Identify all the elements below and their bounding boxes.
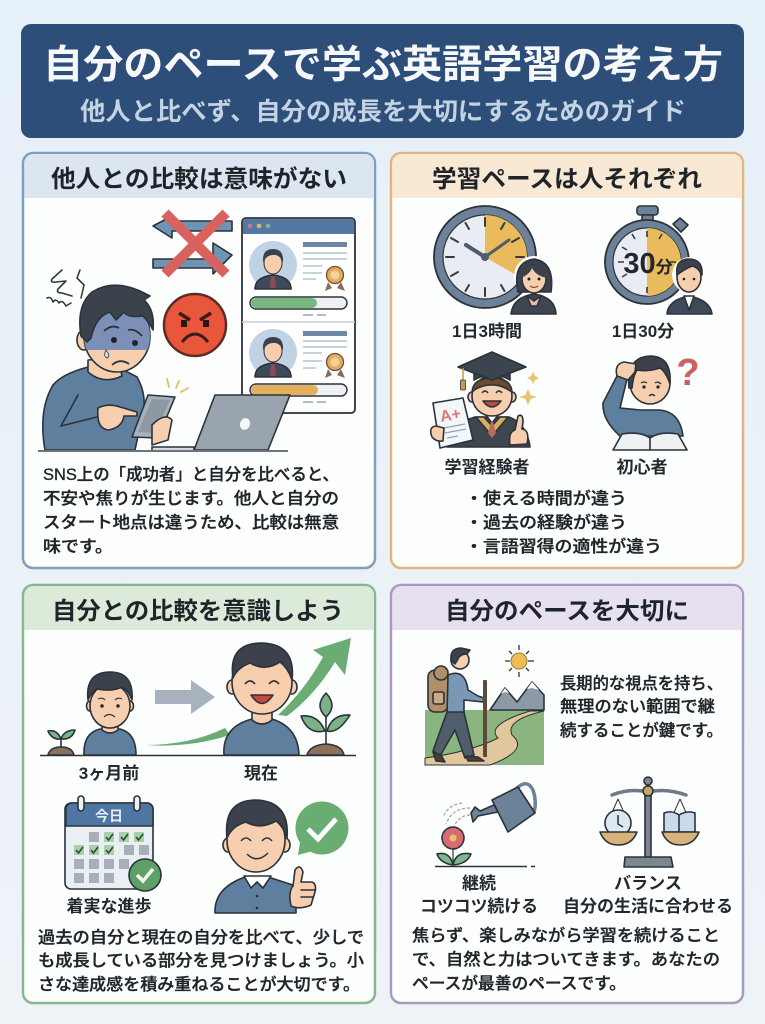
panel: 他人との比較は意味がない [23, 153, 375, 568]
profile card 2 [249, 329, 347, 402]
icon: woman [511, 256, 556, 314]
label: 学習経験者 [444, 457, 530, 477]
text block: スタート地点は違うため、比較は無意 [43, 513, 339, 532]
text block [38, 928, 365, 994]
icon: grown plant [301, 693, 350, 755]
text block: 無理のない範囲で継 [560, 697, 715, 716]
icon: angry face [164, 294, 226, 356]
arrow: gray [155, 680, 215, 714]
label: continuation: コツコツ続ける [420, 897, 538, 916]
panel: 自分のペースを大切に [391, 585, 743, 1003]
profile window [242, 218, 355, 413]
icon: question mark: ? [676, 352, 700, 394]
text block [43, 465, 339, 556]
heading: 自分のペースを大切に [445, 598, 689, 625]
icon: growth arrow [145, 638, 351, 746]
icon: stopwatch [605, 206, 689, 304]
text: 30分: 30分 [623, 248, 673, 280]
icon: check speech bubble [296, 802, 348, 855]
text block: さな達成感を積み重ねることが大切です。 [38, 974, 360, 994]
text block: 過去の自分と現在の自分を比べて、少しで [38, 928, 364, 947]
profile card 1 [249, 241, 347, 315]
subtitle: 他人と比べず、自分の成長を大切にするためのガイド [80, 98, 686, 126]
illustration: smiling person now [224, 643, 299, 755]
illustration: hiker on a path [425, 645, 544, 765]
text block: SNS上の「成功者」と自分を比べると、 [43, 465, 339, 484]
text block: 不安や焦りが生じます。他人と自分の [43, 488, 339, 508]
text block [560, 674, 723, 740]
label: 初心者 [616, 458, 668, 477]
illustration: child 3 months ago [84, 672, 136, 755]
header banner [21, 24, 744, 138]
title: 自分のペースで学ぶ英語学習の考え方 [43, 44, 723, 87]
icon: man in suit [667, 257, 712, 314]
icon: balance scale [600, 777, 699, 867]
label: 1日3時間 [452, 322, 522, 341]
icon: graduate with A+ paper: A+ [439, 406, 462, 426]
text block: 味です。 [43, 537, 113, 556]
heading: 学習ペースは人それぞれ [432, 166, 702, 193]
bullet list: ・使える時間が違う [465, 488, 627, 508]
label: 1日30分 [612, 322, 674, 341]
bullet list [465, 488, 662, 556]
bullet list: ・過去の経験が違う [465, 512, 627, 532]
label: 現在 [244, 764, 278, 783]
label: continuation [420, 874, 538, 916]
icon: confused beginner with book [603, 352, 700, 450]
panel: 自分との比較を意識しよう [23, 585, 375, 1003]
bullet list: ・言語習得の適性が違う [465, 536, 662, 556]
label: 3ヶ月前 [79, 764, 139, 783]
text block: で、自然と力はついてきます。あなたの [412, 949, 720, 969]
icon: laptop [38, 395, 290, 451]
label: continuation: 継続 [462, 874, 496, 893]
panel: 学習ペースは人それぞれ [391, 153, 743, 568]
icon: small sprout [48, 730, 75, 755]
icon: clock 3 hours [434, 206, 536, 308]
text block: 焦らず、楽しみながら学習を続けること [412, 925, 720, 945]
icon: calendar: 今日 [95, 808, 123, 824]
illustration: anxious person with phone [43, 285, 188, 450]
icon: crossed comparison arrows [153, 213, 232, 274]
icon: watering can and flower [435, 784, 535, 866]
heading: 他人との比較は意味がない [51, 165, 347, 193]
text block [412, 925, 720, 993]
text block: ペースが最善のペースです。 [412, 973, 626, 993]
label: balance: バランス [614, 874, 682, 893]
label: 着実な進歩 [66, 896, 152, 916]
icon: calendar [65, 796, 161, 891]
text block: も成長している部分を見つけましょう。小 [38, 951, 365, 970]
text block: 続することが鍵です。 [560, 720, 723, 740]
icon: graduate with A+ paper [431, 352, 539, 448]
label: balance [563, 874, 733, 916]
text block: 長期的な視点を持ち、 [560, 674, 723, 693]
icon: stress squiggles [47, 270, 84, 306]
heading: 自分との比較を意識しよう [52, 598, 344, 625]
label: balance: 自分の生活に合わせる [563, 896, 733, 916]
illustration: person with thumbs up [215, 800, 316, 913]
